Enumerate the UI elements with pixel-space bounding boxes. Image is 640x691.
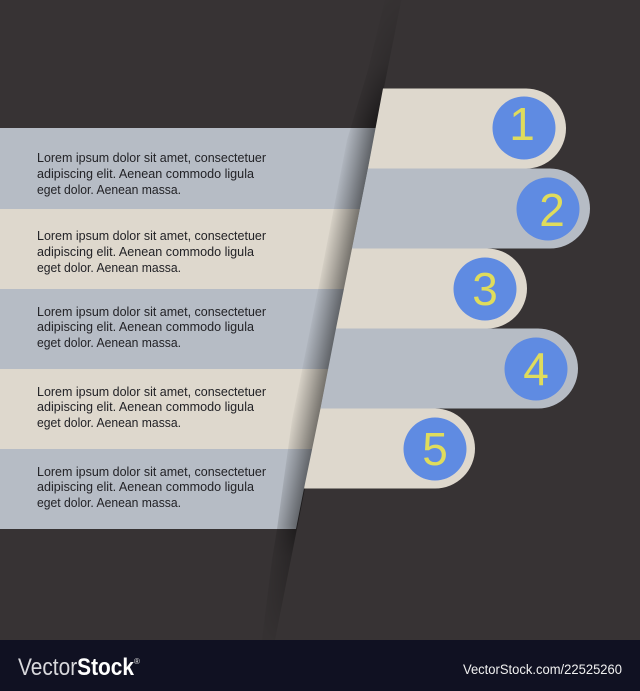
tab 1 <box>368 88 566 168</box>
badge 2: 2 <box>539 184 565 236</box>
text block 1: adipiscing elit. Aenean commodo ligula <box>37 167 254 181</box>
band 5 <box>0 449 315 529</box>
text block 1: Lorem ipsum dolor sit amet, consectetuer <box>37 151 266 165</box>
tab 3 <box>336 248 527 328</box>
text block 5: Lorem ipsum dolor sit amet, consectetuer <box>37 465 266 479</box>
text block 2: eget dolor. Aenean massa. <box>37 261 181 275</box>
logo wordmark: VectorStock <box>18 654 135 681</box>
text block 3 <box>37 305 266 350</box>
footer bar <box>0 640 640 691</box>
band 4 <box>0 369 331 449</box>
text block 3: adipiscing elit. Aenean commodo ligula <box>37 320 254 334</box>
registered mark: ® <box>134 657 140 666</box>
text block 5 <box>37 465 266 510</box>
text block 2 <box>37 229 266 275</box>
tab 4 <box>320 328 578 408</box>
text block 3: eget dolor. Aenean massa. <box>37 336 181 350</box>
text block 4: adipiscing elit. Aenean commodo ligula <box>37 400 254 414</box>
text block 5: adipiscing elit. Aenean commodo ligula <box>37 480 254 494</box>
band 2 <box>0 209 363 289</box>
text block 2: adipiscing elit. Aenean commodo ligula <box>37 245 254 259</box>
badge 5: 5 <box>422 423 448 475</box>
text block 2: Lorem ipsum dolor sit amet, consectetuer <box>37 229 266 243</box>
text block 1 <box>37 151 266 197</box>
panel: left text bands <box>0 128 379 529</box>
badge 2 <box>516 178 580 240</box>
text block 4: eget dolor. Aenean massa. <box>37 416 181 430</box>
panel: right numbered tabs <box>304 88 590 488</box>
badge 5 <box>404 418 466 480</box>
image id: VectorStock.com/22525260 <box>463 662 622 677</box>
text block 3: Lorem ipsum dolor sit amet, consectetuer <box>37 305 266 319</box>
badge 1: 1 <box>509 98 535 150</box>
text block 5: eget dolor. Aenean massa. <box>37 496 181 510</box>
text block 4 <box>37 385 266 430</box>
fold shadow <box>277 66 388 592</box>
band 3 <box>0 289 347 369</box>
text block 1: eget dolor. Aenean massa. <box>37 183 181 197</box>
tab 5 <box>304 408 475 488</box>
band 1 <box>0 128 379 209</box>
badge 1 <box>492 96 556 160</box>
text block 4: Lorem ipsum dolor sit amet, consectetuer <box>37 385 266 399</box>
badge 3: 3 <box>472 263 498 315</box>
badge 3 <box>454 258 516 320</box>
badge 4 <box>504 338 568 400</box>
badge 4: 4 <box>523 343 549 395</box>
tab 2 <box>352 168 590 248</box>
